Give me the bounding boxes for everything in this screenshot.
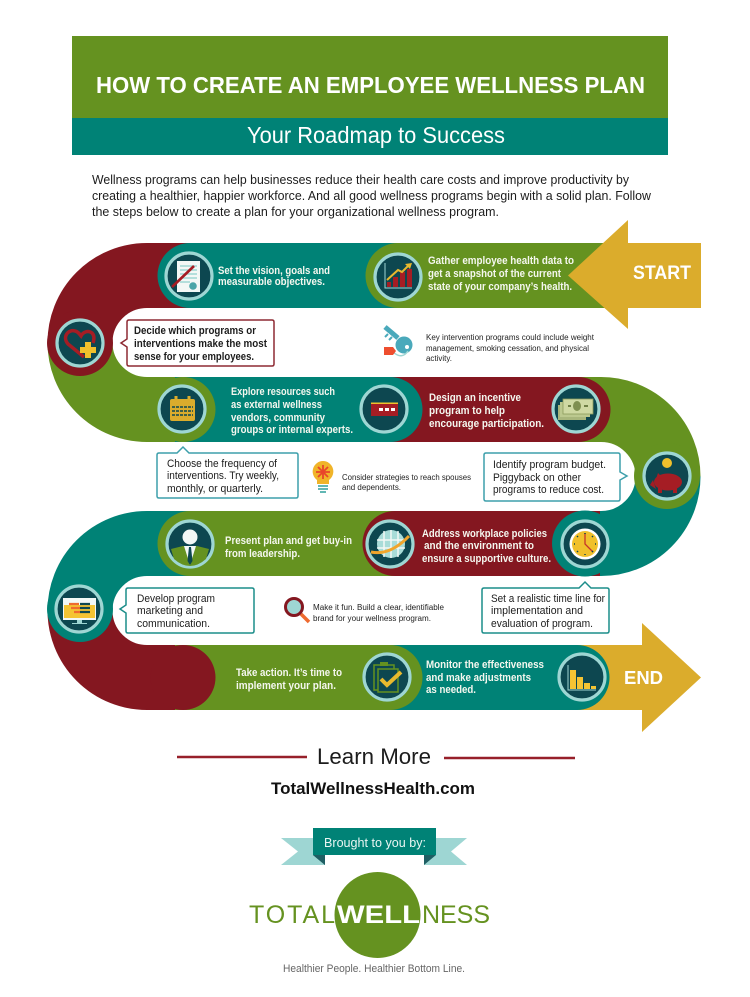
- subtitle: Your Roadmap to Success: [247, 122, 505, 148]
- icon: magnifying glass: [286, 598, 309, 622]
- note: key interventions: [384, 327, 595, 363]
- road right teal curve: [585, 476, 668, 544]
- callout: marketing: communication.: [137, 618, 210, 630]
- clock node backing: [552, 510, 618, 576]
- step: take action: Take action. It’s time to: [236, 667, 342, 679]
- roadmap road: [47, 243, 701, 732]
- logo: total wellness: NESS: [422, 901, 490, 929]
- road row 2 red segment: [380, 377, 610, 442]
- website: TotalWellnessHealth.com: [271, 780, 475, 798]
- note: key interventions: management, smoking cessation, and physical: [426, 344, 589, 353]
- road row 1 red curve: [80, 276, 200, 342]
- note: make it fun: [286, 598, 445, 623]
- step: monitor: Monitor the effectiveness: [426, 659, 544, 671]
- step: explore resources: as external wellness: [231, 399, 322, 411]
- callout: marketing: [120, 588, 254, 633]
- learn more heading: Learn More: [317, 744, 431, 769]
- step: monitor: and make adjustments: [426, 672, 531, 684]
- step: gather data: [375, 254, 574, 300]
- callout: frequency: monthly, or quarterly.: [167, 483, 263, 495]
- note: make it fun: Make it fun. Build a clear, identifiable: [313, 603, 445, 612]
- icon: money stack: [553, 386, 599, 432]
- note: reach spouses: and dependents.: [342, 483, 401, 492]
- monitor node backing: [47, 576, 113, 642]
- step: workplace policies: ensure a supportive culture.: [422, 553, 551, 565]
- icon: heart with plus: [57, 320, 103, 366]
- intro paragraph: creating a healthier, happier workforce. And all good wellness programs begin with a solid plan. Follow: [92, 189, 652, 203]
- step: monitor: [426, 659, 544, 696]
- icon: clock: [562, 521, 608, 567]
- callout: time line: implementation and: [491, 605, 583, 617]
- step: marketing: [56, 586, 254, 633]
- header banner: [72, 36, 668, 155]
- icon: falling bars: [559, 654, 605, 700]
- icon: light bulb: [313, 461, 333, 492]
- callout: frequency: interventions. Try weekly,: [167, 470, 279, 482]
- icon: monitor: [56, 586, 102, 632]
- step: explore resources: Explore resources such: [231, 386, 335, 398]
- callout: frequency: [157, 447, 298, 498]
- icon: clipboard check: [364, 654, 410, 700]
- icon: calendar: [159, 386, 205, 432]
- road left teal curve: [80, 544, 200, 610]
- note: reach spouses: [313, 461, 471, 492]
- end label: END: [624, 667, 663, 688]
- road row 3 red segment: [362, 511, 600, 576]
- step: explore resources: groups or internal experts.: [231, 424, 353, 436]
- icon: rising bar chart: [375, 254, 421, 300]
- logo: total wellness: TOTAL: [249, 901, 335, 929]
- step: incentive program: Design an incentive: [429, 392, 521, 404]
- road row 2 green curve: [80, 342, 183, 410]
- intro paragraph: Wellness programs can help businesses reduce their health care costs and improve productivity by: [92, 173, 630, 187]
- step: present plan: from leadership.: [225, 548, 300, 560]
- ribbon: brought to you by: [281, 828, 467, 865]
- road row 3 green segment: [158, 511, 400, 576]
- icon: business person: [167, 521, 213, 567]
- step: present plan: Present plan and get buy-in: [225, 535, 352, 547]
- title: HOW TO CREATE AN EMPLOYEE WELLNESS PLAN: [96, 72, 645, 98]
- callout: marketing: marketing and: [137, 605, 203, 617]
- icon: ticket bar: [361, 386, 407, 432]
- piggy node backing: [634, 443, 700, 509]
- step: incentive program: program to help: [429, 405, 505, 417]
- ribbon: brought to you by: Brought to you by:: [324, 836, 426, 850]
- callout: decide: [121, 320, 274, 366]
- step: incentive program: encourage participation.: [429, 418, 544, 430]
- callout: frequency: Choose the frequency of: [167, 458, 278, 470]
- road row 4 green segment: [175, 645, 422, 710]
- step: workplace policies: Address workplace policies: [422, 528, 547, 540]
- road right green curve: [570, 410, 668, 476]
- intro paragraph: [92, 173, 652, 219]
- note: key interventions: activity.: [426, 354, 452, 363]
- logo: total wellness: WELL: [337, 901, 420, 929]
- road row 2 teal segment: [175, 377, 422, 442]
- start arrow head: [568, 220, 701, 329]
- step: take action: [236, 667, 342, 692]
- icon: document and pen: [166, 253, 212, 299]
- callout: time line: Set a realistic time line for: [491, 593, 605, 605]
- red end cap: [150, 645, 216, 710]
- callout: budget: programs to reduce cost.: [493, 484, 604, 496]
- icon: piggy bank: [644, 453, 690, 499]
- step: monitor: as needed.: [426, 684, 476, 696]
- callout: time line: [482, 582, 609, 633]
- green end cap: [150, 377, 216, 442]
- step: vision: [166, 253, 330, 299]
- step: gather data: Gather employee health data to: [428, 255, 574, 267]
- step: take action: implement your plan.: [236, 680, 336, 692]
- logo: total wellness: [249, 872, 490, 958]
- step: explore resources: vendors, community: [231, 412, 325, 424]
- note: reach spouses: Consider strategies to reach spouses: [342, 473, 471, 482]
- callout: budget: Identify program budget.: [493, 459, 606, 471]
- callout: time line: evaluation of program.: [491, 618, 593, 630]
- road row 1 green segment: [366, 243, 640, 308]
- road left red curve: [80, 610, 183, 678]
- road row 4 teal segment: [380, 645, 610, 710]
- icon: key: [384, 327, 412, 356]
- callout: marketing: Develop program: [137, 593, 215, 605]
- callout: budget: Piggyback on other: [493, 472, 581, 484]
- tagline: Healthier People. Healthier Bottom Line.: [283, 963, 465, 975]
- callout: budget: [484, 453, 627, 501]
- intro paragraph: the steps below to create a plan for your organizational wellness program.: [92, 205, 499, 219]
- step: present plan: [167, 521, 352, 567]
- icon: globe with ring: [367, 521, 413, 567]
- road row 1 teal segment: [158, 243, 410, 308]
- start arrow head: START: [633, 262, 691, 284]
- step: incentive program: [361, 386, 544, 432]
- step: vision: Set the vision, goals and: [218, 265, 330, 277]
- step: vision: measurable objectives.: [218, 276, 325, 288]
- note: key interventions: Key intervention programs could include weight: [426, 333, 595, 342]
- note: make it fun: brand for your wellness program.: [313, 614, 431, 623]
- step: workplace policies: and the environment to: [424, 540, 534, 552]
- heart node backing: [47, 310, 113, 376]
- step: decide programs: [57, 320, 274, 366]
- callout: decide: Decide which programs or: [134, 325, 257, 337]
- step: explore resources: [159, 386, 353, 436]
- end arrow: [570, 623, 701, 732]
- callout: decide: interventions make the most: [134, 338, 267, 350]
- callout: decide: sense for your employees.: [134, 351, 254, 363]
- step: gather data: get a snapshot of the current: [428, 268, 561, 280]
- step: program budget: [484, 453, 690, 501]
- step: workplace policies: [367, 521, 551, 567]
- step: gather data: state of your company’s health.: [428, 281, 572, 293]
